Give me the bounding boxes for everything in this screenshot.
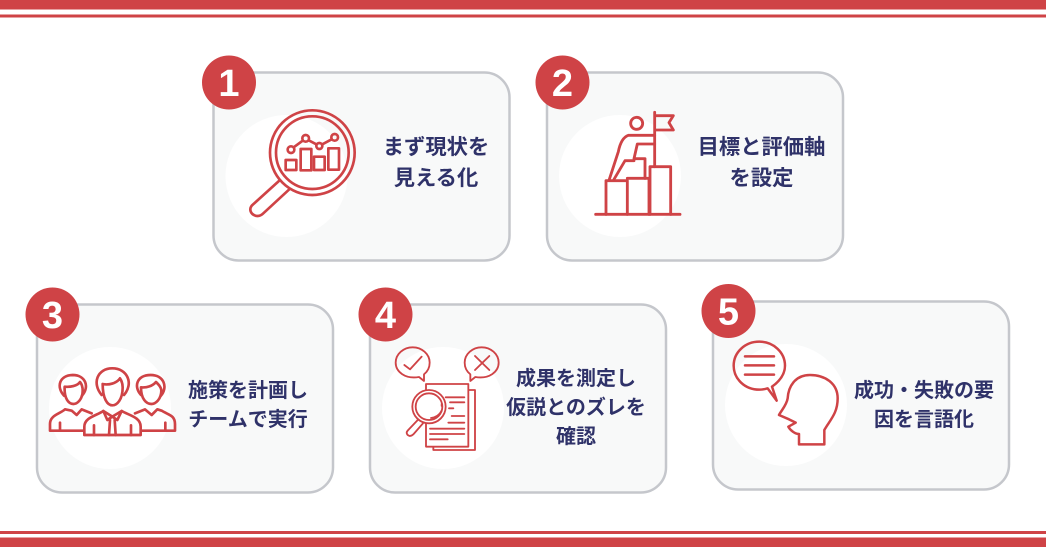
- badge 3: [26, 288, 80, 342]
- badge 4: [358, 288, 412, 342]
- bottom double band: [0, 531, 1046, 547]
- text: step 3: チームで実行: [188, 408, 308, 431]
- icon: magnifier with chart: [250, 110, 355, 216]
- panel: step 2: [536, 56, 843, 260]
- text: step 4: 成果を測定し: [516, 366, 636, 390]
- text: step 2: [698, 135, 825, 190]
- panel: step 3: [26, 288, 333, 492]
- badge 2: [536, 56, 590, 110]
- card background 1: [214, 72, 510, 260]
- text: step 5: [854, 378, 994, 431]
- text: step 4: 仮説とのズレを: [506, 395, 646, 419]
- icon: speaking head: [734, 342, 838, 444]
- icon: team of three: [50, 368, 175, 435]
- badge 5: [702, 284, 756, 338]
- text: step 5: 因を言語化: [874, 408, 974, 431]
- text: step 2: 目標と評価軸: [698, 135, 825, 159]
- badge 2: 2: [552, 63, 573, 105]
- white circle 2: [559, 115, 681, 237]
- icon: climber with flag: [596, 112, 680, 214]
- text: step 4: [506, 366, 646, 448]
- panel: step 4: [358, 288, 666, 492]
- white circle 5: [725, 344, 847, 466]
- badge 3: 3: [42, 295, 63, 337]
- white circle 4: [382, 347, 504, 469]
- badge 4: 4: [375, 295, 396, 337]
- text: step 1: 見える化: [394, 166, 478, 190]
- badge 5: 5: [718, 292, 739, 334]
- text: step 3: 施策を計画し: [188, 379, 308, 402]
- card background 2: [547, 72, 843, 260]
- white circle 1: [226, 115, 348, 237]
- card background 3: [37, 304, 333, 492]
- text: step 1: [383, 135, 489, 190]
- icon: documents with magnifier and speech bubbles: [396, 347, 499, 450]
- text: step 5: 成功・失敗の要: [854, 378, 994, 402]
- text: step 4: 確認: [556, 425, 596, 448]
- panel: step 1: [202, 56, 510, 260]
- card background 5: [713, 302, 1009, 490]
- badge 1: 1: [218, 63, 240, 105]
- badge 1: [202, 56, 256, 110]
- panel: step 5: [702, 284, 1009, 490]
- text: step 2: を設定: [730, 166, 793, 190]
- text: step 1: まず現状を: [383, 135, 489, 159]
- top double band: [0, 0, 1046, 18]
- text: step 3: [188, 379, 308, 431]
- card background 4: [370, 304, 666, 492]
- white circle 3: [49, 347, 171, 469]
